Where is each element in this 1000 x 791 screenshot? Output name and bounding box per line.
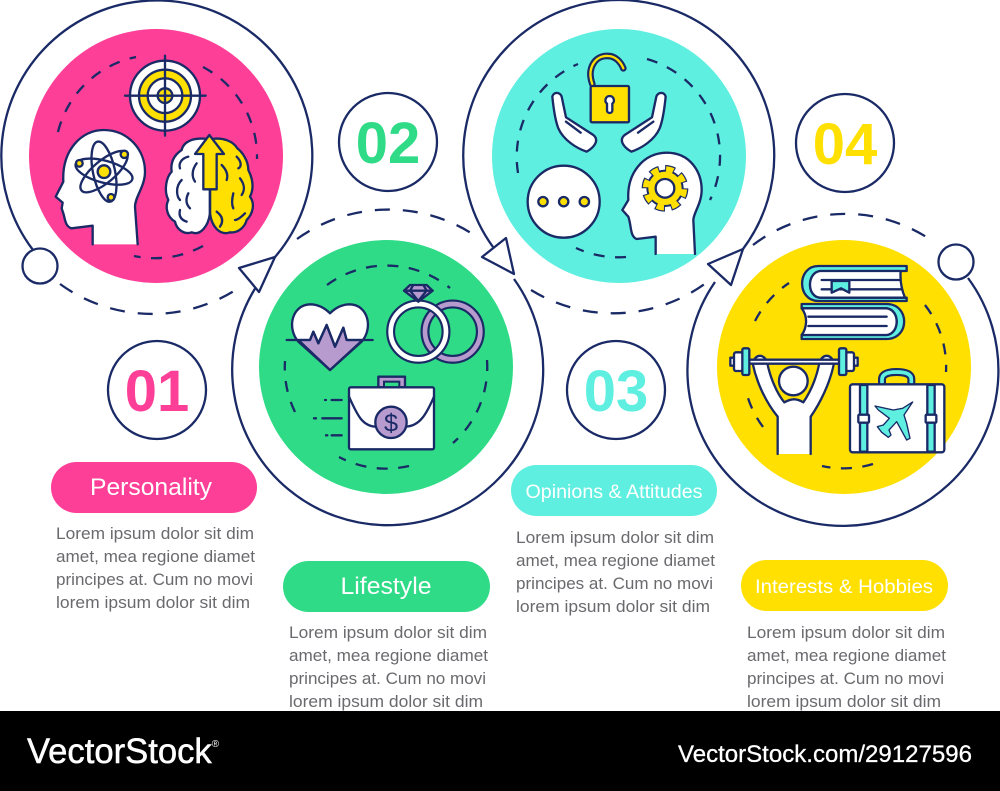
footer bar	[0, 711, 1000, 791]
text block 1: Lorem ipsum dolor sit dim	[56, 524, 254, 543]
text block 2: principes at. Cum no movi	[289, 669, 486, 688]
step 2 panel: lifestyle	[232, 210, 543, 525]
dashed inner arcs 3	[517, 59, 720, 257]
icon: suitcase with plane	[850, 372, 944, 452]
teal disc	[492, 29, 746, 283]
connector node 1	[22, 248, 58, 284]
icon: target	[125, 56, 206, 136]
label: lifestyle	[283, 561, 490, 612]
icon: wedding rings	[391, 285, 480, 359]
number 04: 04	[813, 112, 877, 177]
text block 3: lorem ipsum dolor sit dim	[516, 597, 710, 616]
dashed outer arc 3	[531, 283, 706, 313]
text block 1	[56, 524, 255, 612]
step 3 panel: opinions and attitudes	[463, 0, 774, 313]
icon: stacked books	[802, 266, 907, 339]
icon: head with gear	[622, 153, 702, 254]
text block 1: lorem ipsum dolor sit dim	[56, 593, 250, 612]
text block 4: lorem ipsum dolor sit dim	[747, 692, 941, 711]
text block 2: amet, mea regione diamet	[289, 646, 488, 665]
number 02: 02	[356, 111, 420, 176]
number 01: 01	[125, 359, 189, 424]
dashed inner arcs 4	[748, 283, 946, 468]
icon: open padlock	[591, 56, 629, 122]
step 4 panel: interests and hobbies	[687, 214, 998, 526]
text block 2: lorem ipsum dolor sit dim	[289, 692, 483, 711]
icon: head with atom	[56, 130, 145, 244]
green disc	[259, 240, 513, 494]
text block 2	[289, 623, 488, 711]
number 04	[796, 94, 894, 192]
number 03	[567, 341, 665, 439]
icon: brain with arrow	[166, 135, 253, 233]
ring 1	[1, 0, 312, 257]
dashed outer arc 4	[753, 214, 928, 245]
label: interests and hobbies	[741, 560, 948, 611]
arrowhead 1	[239, 257, 275, 292]
text block 1: principes at. Cum no movi	[56, 570, 253, 589]
icon: speech bubble dots	[528, 166, 600, 238]
icon: open hands	[552, 93, 666, 152]
icons 2	[287, 285, 480, 449]
icons 1	[56, 56, 253, 244]
text block 2: Lorem ipsum dolor sit dim	[289, 623, 487, 642]
text block 3	[516, 528, 715, 616]
connector node 4	[938, 244, 974, 280]
step 1 panel: personality	[1, 0, 312, 314]
dashed outer arc 2	[297, 210, 471, 239]
text block 4	[747, 623, 946, 711]
ring 4	[687, 278, 998, 526]
pink disc	[29, 29, 283, 283]
text block 1: amet, mea regione diamet	[56, 547, 255, 566]
arrowhead 3	[708, 249, 743, 285]
arrowhead 2	[482, 238, 514, 274]
text block 3: Lorem ipsum dolor sit dim	[516, 528, 714, 547]
number 02	[339, 93, 437, 191]
icons 4	[730, 266, 944, 454]
footer bar: VectorStock.com/29127596	[678, 741, 972, 768]
footer bar: ®	[212, 739, 220, 750]
text block 4: Lorem ipsum dolor sit dim	[747, 623, 945, 642]
icon: weightlifter	[730, 348, 858, 454]
label: opinions and attitudes	[511, 465, 717, 516]
icons 3	[528, 56, 702, 254]
label: lifestyle: Lifestyle	[340, 573, 432, 600]
yellow disc	[717, 240, 971, 494]
label: opinions and attitudes: Opinions & Attitudes	[526, 482, 702, 503]
dashed inner arcs 2	[285, 266, 487, 469]
ring 2	[232, 279, 543, 525]
label: personality	[51, 462, 257, 513]
icon: briefcase with dollar: $	[384, 409, 398, 437]
label: personality: Personality	[90, 474, 212, 501]
ring 3	[463, 0, 774, 249]
number 01	[108, 341, 206, 439]
text block 4: principes at. Cum no movi	[747, 669, 944, 688]
text block 3: principes at. Cum no movi	[516, 574, 713, 593]
text block 3: amet, mea regione diamet	[516, 551, 715, 570]
text block 4: amet, mea regione diamet	[747, 646, 946, 665]
icon: heart with pulse	[287, 304, 373, 370]
icon: briefcase with dollar	[314, 377, 434, 449]
dashed inner arcs 1	[58, 57, 257, 258]
number 03: 03	[584, 359, 648, 424]
footer bar: VectorStock	[27, 732, 214, 771]
dashed outer arc 1	[60, 284, 243, 314]
label: interests and hobbies: Interests & Hobbies	[755, 577, 933, 598]
